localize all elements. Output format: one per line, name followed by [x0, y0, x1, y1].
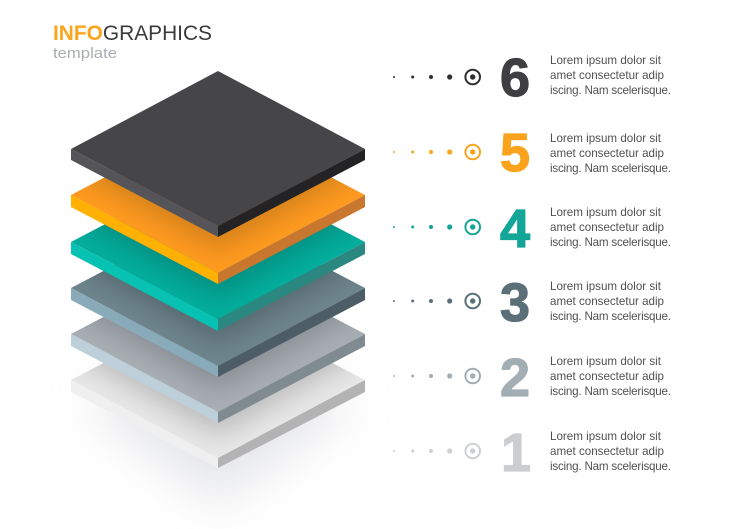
stacked layers [71, 71, 365, 468]
text 5: Lorem ipsum dolor sit [550, 132, 662, 145]
subtitle: template [53, 46, 117, 62]
number 6: 6 [500, 48, 530, 108]
dots and target 3 [393, 294, 480, 308]
title: INFOGRAPHICS [53, 21, 212, 45]
text 4: Lorem ipsum dolor sit [550, 206, 662, 219]
row 5 [393, 123, 671, 183]
dots and target 2 [393, 369, 480, 383]
number 3: 3 [500, 273, 530, 333]
row 4 [393, 199, 671, 259]
text 6: iscing. Nam scelerisque. [550, 84, 671, 97]
layer 3 [71, 265, 365, 377]
row 6 [393, 48, 671, 108]
title [53, 21, 212, 62]
text 3: iscing. Nam scelerisque. [550, 310, 671, 323]
number 1: 1 [501, 423, 531, 483]
text 5: amet consectetur adip [550, 147, 664, 160]
number 5: 5 [500, 123, 530, 183]
dots and target 5 [393, 145, 480, 159]
text 4: amet consectetur adip [550, 221, 664, 234]
text 3: Lorem ipsum dolor sit [550, 280, 662, 293]
number 4: 4 [500, 199, 530, 259]
dots and target 6 [393, 70, 480, 84]
row 2 [393, 348, 671, 408]
number 2: 2 [500, 348, 530, 408]
text 1: amet consectetur adip [550, 445, 664, 458]
text 1 [550, 430, 671, 473]
text 4 [550, 206, 671, 249]
text 6: Lorem ipsum dolor sit [550, 54, 662, 67]
row 3 [393, 273, 671, 333]
text 4: iscing. Nam scelerisque. [550, 236, 671, 249]
text 2: Lorem ipsum dolor sit [550, 355, 662, 368]
floor shadow [85, 335, 355, 505]
layer 5 [71, 172, 365, 284]
dots and target 4 [393, 220, 480, 234]
layer 2 [71, 311, 365, 423]
text 2 [550, 355, 671, 398]
layer 1 [71, 357, 365, 468]
row 1 [393, 423, 671, 483]
text 3: amet consectetur adip [550, 295, 664, 308]
text 2: iscing. Nam scelerisque. [550, 385, 671, 398]
layer 4 [71, 218, 365, 331]
dots and target 1 [393, 444, 480, 458]
text 1: iscing. Nam scelerisque. [550, 460, 671, 473]
text 6: amet consectetur adip [550, 69, 664, 82]
text 2: amet consectetur adip [550, 370, 664, 383]
text 5 [550, 132, 671, 175]
text 6 [550, 54, 671, 97]
text 5: iscing. Nam scelerisque. [550, 162, 671, 175]
layer 6 [71, 71, 365, 237]
text 3 [550, 280, 671, 323]
text 1: Lorem ipsum dolor sit [550, 430, 662, 443]
